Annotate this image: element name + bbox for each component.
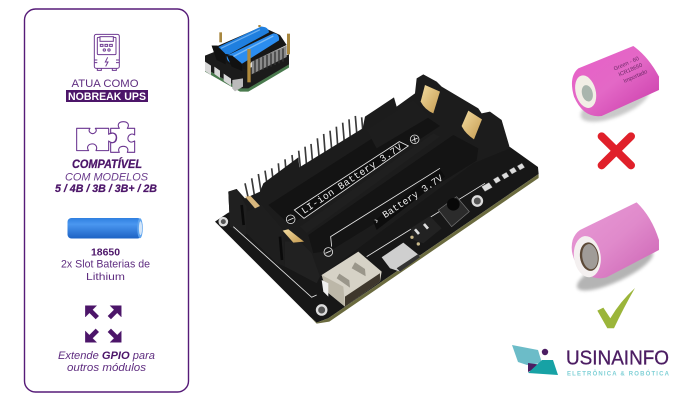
logo tagline: ELETRÔNICA & ROBÓTICA	[567, 370, 670, 378]
logo: Usinainfo	[512, 345, 670, 378]
logo wordmark: USINAINFO	[566, 348, 669, 370]
text: battery slots: Lithium	[86, 271, 125, 283]
logo mark	[512, 345, 558, 375]
icon: expand arrows	[85, 306, 121, 342]
slot interiors	[268, 110, 440, 225]
image: wrong battery: Green - 60	[613, 56, 640, 72]
text: compatible models: COM MODELOS	[65, 172, 149, 184]
pcb edge	[310, 174, 539, 324]
gpio pins	[245, 116, 363, 198]
battery silkscreen 2: › Battery 3.7V	[371, 173, 445, 227]
text: extends GPIO: outros módulos	[67, 362, 147, 374]
usb-c port	[382, 243, 420, 272]
icon: puzzle pieces	[77, 122, 135, 152]
dip switch	[411, 216, 442, 243]
push button	[438, 197, 469, 227]
icon: nobreak UPS	[94, 34, 119, 70]
text: battery slots: 2x Slot Baterias de	[61, 259, 150, 271]
text: battery slots: 18650	[91, 247, 120, 259]
image: wrong battery: Importado	[623, 69, 649, 85]
icon: red cross	[602, 136, 631, 165]
image: wrong battery: ICR18650	[618, 63, 644, 78]
image: UPS expansion board	[215, 74, 539, 324]
text: battery slots	[61, 247, 150, 283]
text: compatible models: COMPATÍVEL	[72, 158, 142, 171]
right column	[571, 46, 659, 328]
text: atua como: ATUA COMO	[72, 78, 139, 90]
battery holder	[228, 74, 510, 283]
text: compatible models: 5 / 4B / 3B / 3B+ / 2B	[55, 183, 157, 195]
label: nobreak UPS: NOBREAK UPS	[68, 91, 146, 103]
usb port	[322, 252, 382, 307]
leds	[482, 163, 525, 191]
text: extends GPIO: Extende GPIO para	[58, 350, 155, 362]
icon: green check	[597, 288, 635, 328]
panel: features	[24, 9, 188, 392]
text: extends GPIO	[58, 350, 155, 374]
image: assembled Raspberry Pi stack	[205, 25, 290, 92]
mounting holes	[220, 196, 482, 315]
battery silkscreen 1: LI-ion Battery 3.7V	[300, 142, 404, 216]
image: correct battery	[571, 202, 659, 298]
board pcb	[215, 147, 539, 323]
gold contacts	[245, 196, 260, 208]
polarity marks	[233, 135, 485, 297]
image: wrong battery	[572, 46, 659, 129]
front clips	[228, 189, 247, 237]
text: compatible models	[55, 158, 157, 195]
icon: blue 18650 battery	[68, 218, 143, 238]
